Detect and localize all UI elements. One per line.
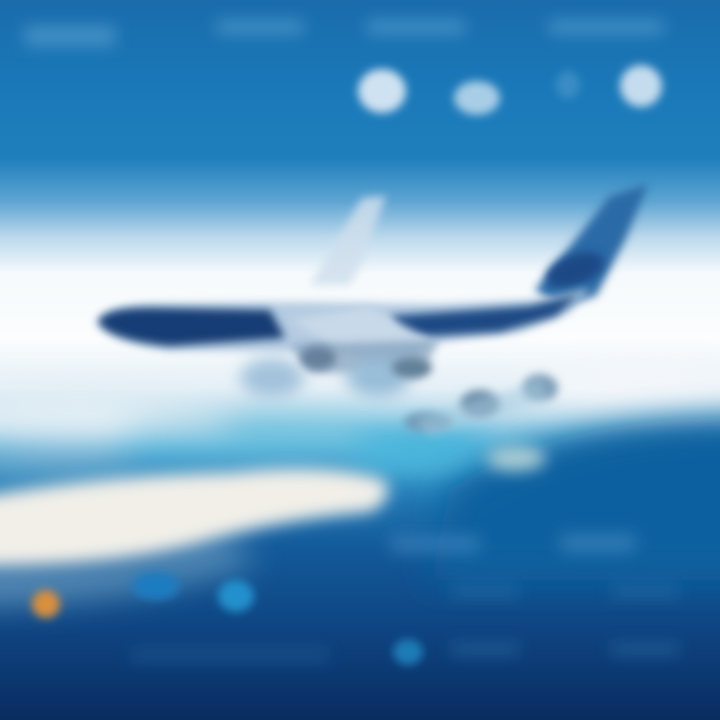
cloud body [0,468,388,566]
fragment 2 [460,390,500,418]
engine left [240,358,304,398]
icons: top weather circles [358,65,662,115]
engine dark accents [300,346,336,370]
icon: blue blob 1 [132,572,180,600]
small cloud right [486,445,546,471]
cloud bank lower left [0,468,388,605]
heading blur 1 [24,26,116,46]
landing gear shade [290,340,440,375]
heading blur 2 [216,20,304,34]
text line blur 2 [610,586,680,596]
fuselage dark rear [390,294,580,338]
dark sea on right [430,418,720,580]
fragment link [415,380,548,436]
fuselage dark front [98,308,285,346]
lower heading 2 [560,534,636,552]
rear wing [310,196,386,285]
icon: small faint circle [556,71,580,99]
text line blur 3 [450,644,520,654]
text line blur 1 [450,586,520,596]
icon: blue blob 2 [218,580,254,612]
fuselage [98,288,590,352]
fragment 1 [404,412,452,432]
icon: blue blob 3 [393,639,423,665]
lower heading 1 [390,536,480,552]
icon: cloud 1 [358,69,406,113]
fragment 3 [522,374,558,402]
main wing [290,306,430,376]
tail fin [535,184,648,306]
heading blur 3 [366,20,466,34]
header text placeholders [24,20,664,46]
text line blur 4 [610,644,680,654]
engine right dark accent [392,358,432,378]
engine middle [346,359,410,397]
text line blur 5 [130,650,330,660]
icon: orange dot [32,590,60,618]
icon: cloud 2 [454,81,500,115]
airplane [98,184,648,398]
ocean haze [0,363,720,476]
tail dark base [542,246,608,294]
heading blur 4 [548,20,664,34]
second small aircraft group [404,374,558,436]
cloud shadow [0,535,260,605]
icon: circle 4 [620,65,662,107]
lower text placeholders [130,534,680,660]
lower icons [32,572,423,665]
